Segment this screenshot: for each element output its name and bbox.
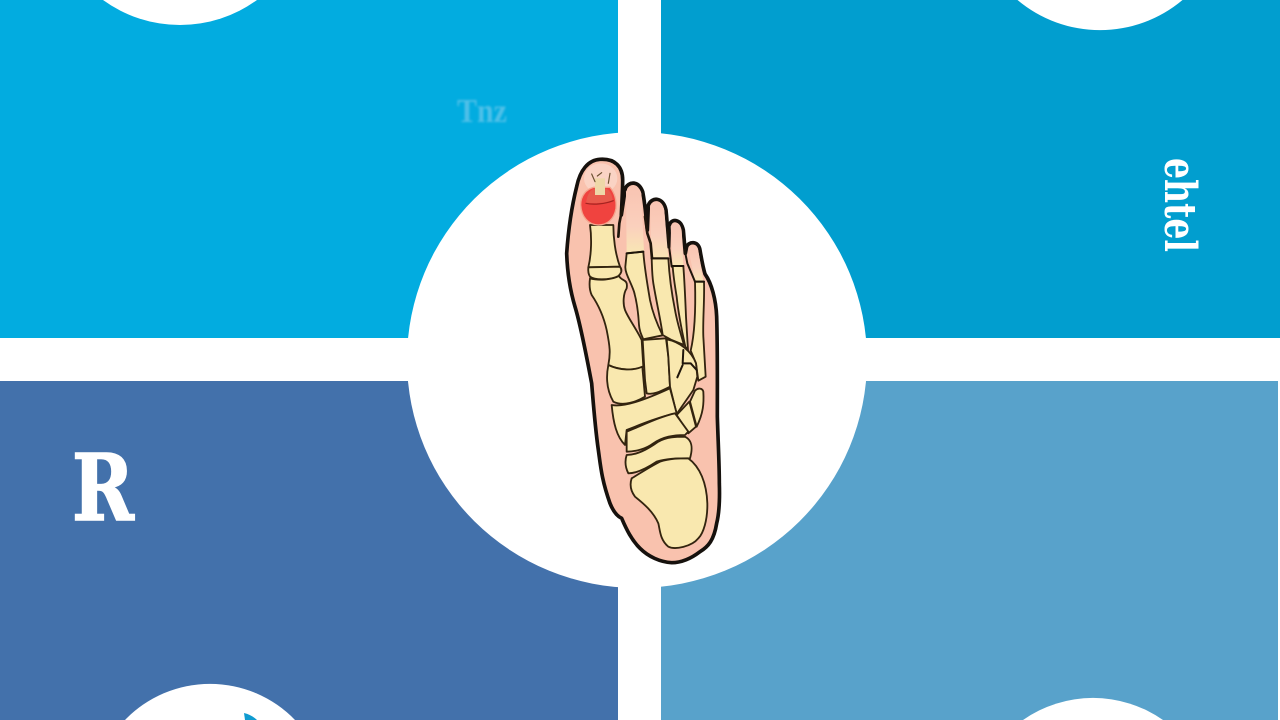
second metatarsal [625, 252, 663, 339]
medial cuneiform [607, 365, 645, 404]
first metatarsal [590, 276, 643, 369]
nail marks [592, 173, 610, 183]
panel: top right [661, 0, 1280, 338]
central white circle [407, 132, 867, 588]
mid tarsal [626, 437, 692, 473]
panel: bottom left [0, 381, 618, 720]
cuboid [677, 402, 696, 433]
lateral cuneiform [667, 339, 697, 414]
rotated label: top right: ehtel [1154, 158, 1205, 252]
panel: top left [0, 0, 618, 338]
inflamed big toe joint [581, 173, 616, 225]
icon circle: bottom right [1023, 698, 1163, 720]
toe interiors [626, 186, 703, 282]
faint label: top left: Tnz [457, 93, 507, 130]
toe bone stub [595, 178, 605, 195]
swelling upper band [586, 188, 613, 203]
icon circle: top right [1018, 0, 1182, 30]
intermediate cuneiform [643, 338, 670, 394]
foot outline [567, 159, 719, 563]
icon circle: top left [103, 0, 257, 25]
third metatarsal [652, 258, 684, 345]
red swelling [581, 187, 616, 225]
panel: bottom right [661, 381, 1278, 720]
icon: blue arrow tip [244, 713, 257, 720]
heel bone [631, 458, 707, 548]
letter label: bottom left: R [72, 434, 134, 542]
foot skeleton illustration [567, 159, 719, 563]
swelling inner line [586, 201, 613, 204]
navicular [612, 388, 677, 445]
fifth metatarsal [691, 282, 706, 381]
talus [627, 413, 688, 452]
big toe joint [588, 267, 621, 279]
side bone [690, 389, 704, 427]
metatarsals and phalanges [588, 225, 707, 548]
fourth metatarsal [673, 266, 688, 350]
icon circle: bottom left [125, 684, 295, 720]
toe detail lines [618, 207, 704, 377]
big toe phalanx [588, 225, 620, 267]
big toe tip highlight [584, 163, 617, 193]
